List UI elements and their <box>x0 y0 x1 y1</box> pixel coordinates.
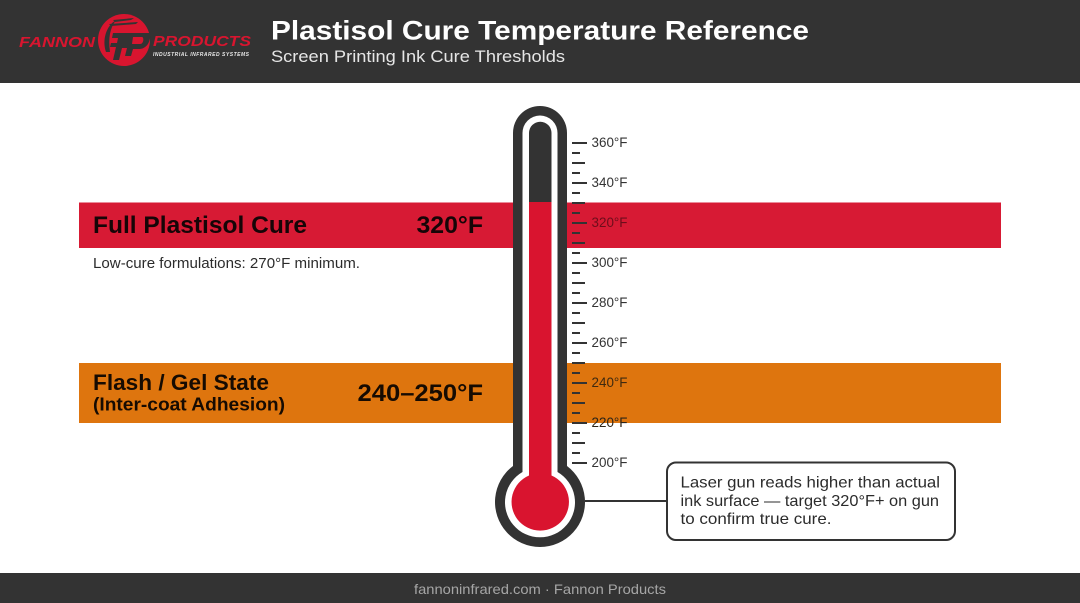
callout: Laser gun reads higher than actual <box>680 474 940 492</box>
scale labels: 240°F <box>592 375 628 390</box>
note: low-cure formulations: Low-cure formulations: 270°F minimum. <box>93 255 360 272</box>
callout: ink surface — target 320°F+ on gun <box>680 493 939 510</box>
callout: to confirm true cure. <box>680 511 832 528</box>
scale labels: 340°F <box>592 175 628 190</box>
scale labels: 300°F <box>592 255 628 270</box>
scale labels: 320°F <box>592 215 628 230</box>
band value: 240–250°F: 240–250°F <box>358 380 483 407</box>
footer bar <box>0 573 1080 603</box>
callout <box>667 462 955 540</box>
subtitle: Screen Printing Ink Cure Thresholds <box>271 47 565 66</box>
callout leader line <box>585 500 667 502</box>
logo: Fannon Products <box>19 14 251 66</box>
logo: Fannon Products: PRODUCTS <box>153 33 251 50</box>
logo: Fannon Products: FANNON <box>19 34 96 51</box>
logo: Fannon Products: INDUSTRIAL INFRARED SYSTEMS <box>153 52 250 58</box>
band value: 320°F: 320°F <box>416 212 483 239</box>
thermometer <box>495 106 585 547</box>
band: full plastisol cure <box>79 202 1001 248</box>
header bar <box>0 0 1080 83</box>
scale labels: 200°F <box>592 455 628 470</box>
band: flash gel state <box>79 363 1001 423</box>
footer text: fannoninfrared.com · Fannon Products <box>414 581 666 597</box>
band heading: flash gel state: Flash / Gel State <box>93 370 269 395</box>
title: Plastisol Cure Temperature Reference <box>271 16 809 46</box>
scale labels: 360°F <box>592 135 628 150</box>
scale labels: 220°F <box>592 415 628 430</box>
scale labels: 260°F <box>592 335 628 350</box>
scale labels <box>592 135 628 470</box>
scale labels: 280°F <box>592 295 628 310</box>
scale ticks <box>572 143 587 463</box>
band heading: full plastisol cure: Full Plastisol Cure <box>93 212 307 239</box>
band subheading: inter-coat adhesion: (Inter-coat Adhesion) <box>93 394 285 414</box>
